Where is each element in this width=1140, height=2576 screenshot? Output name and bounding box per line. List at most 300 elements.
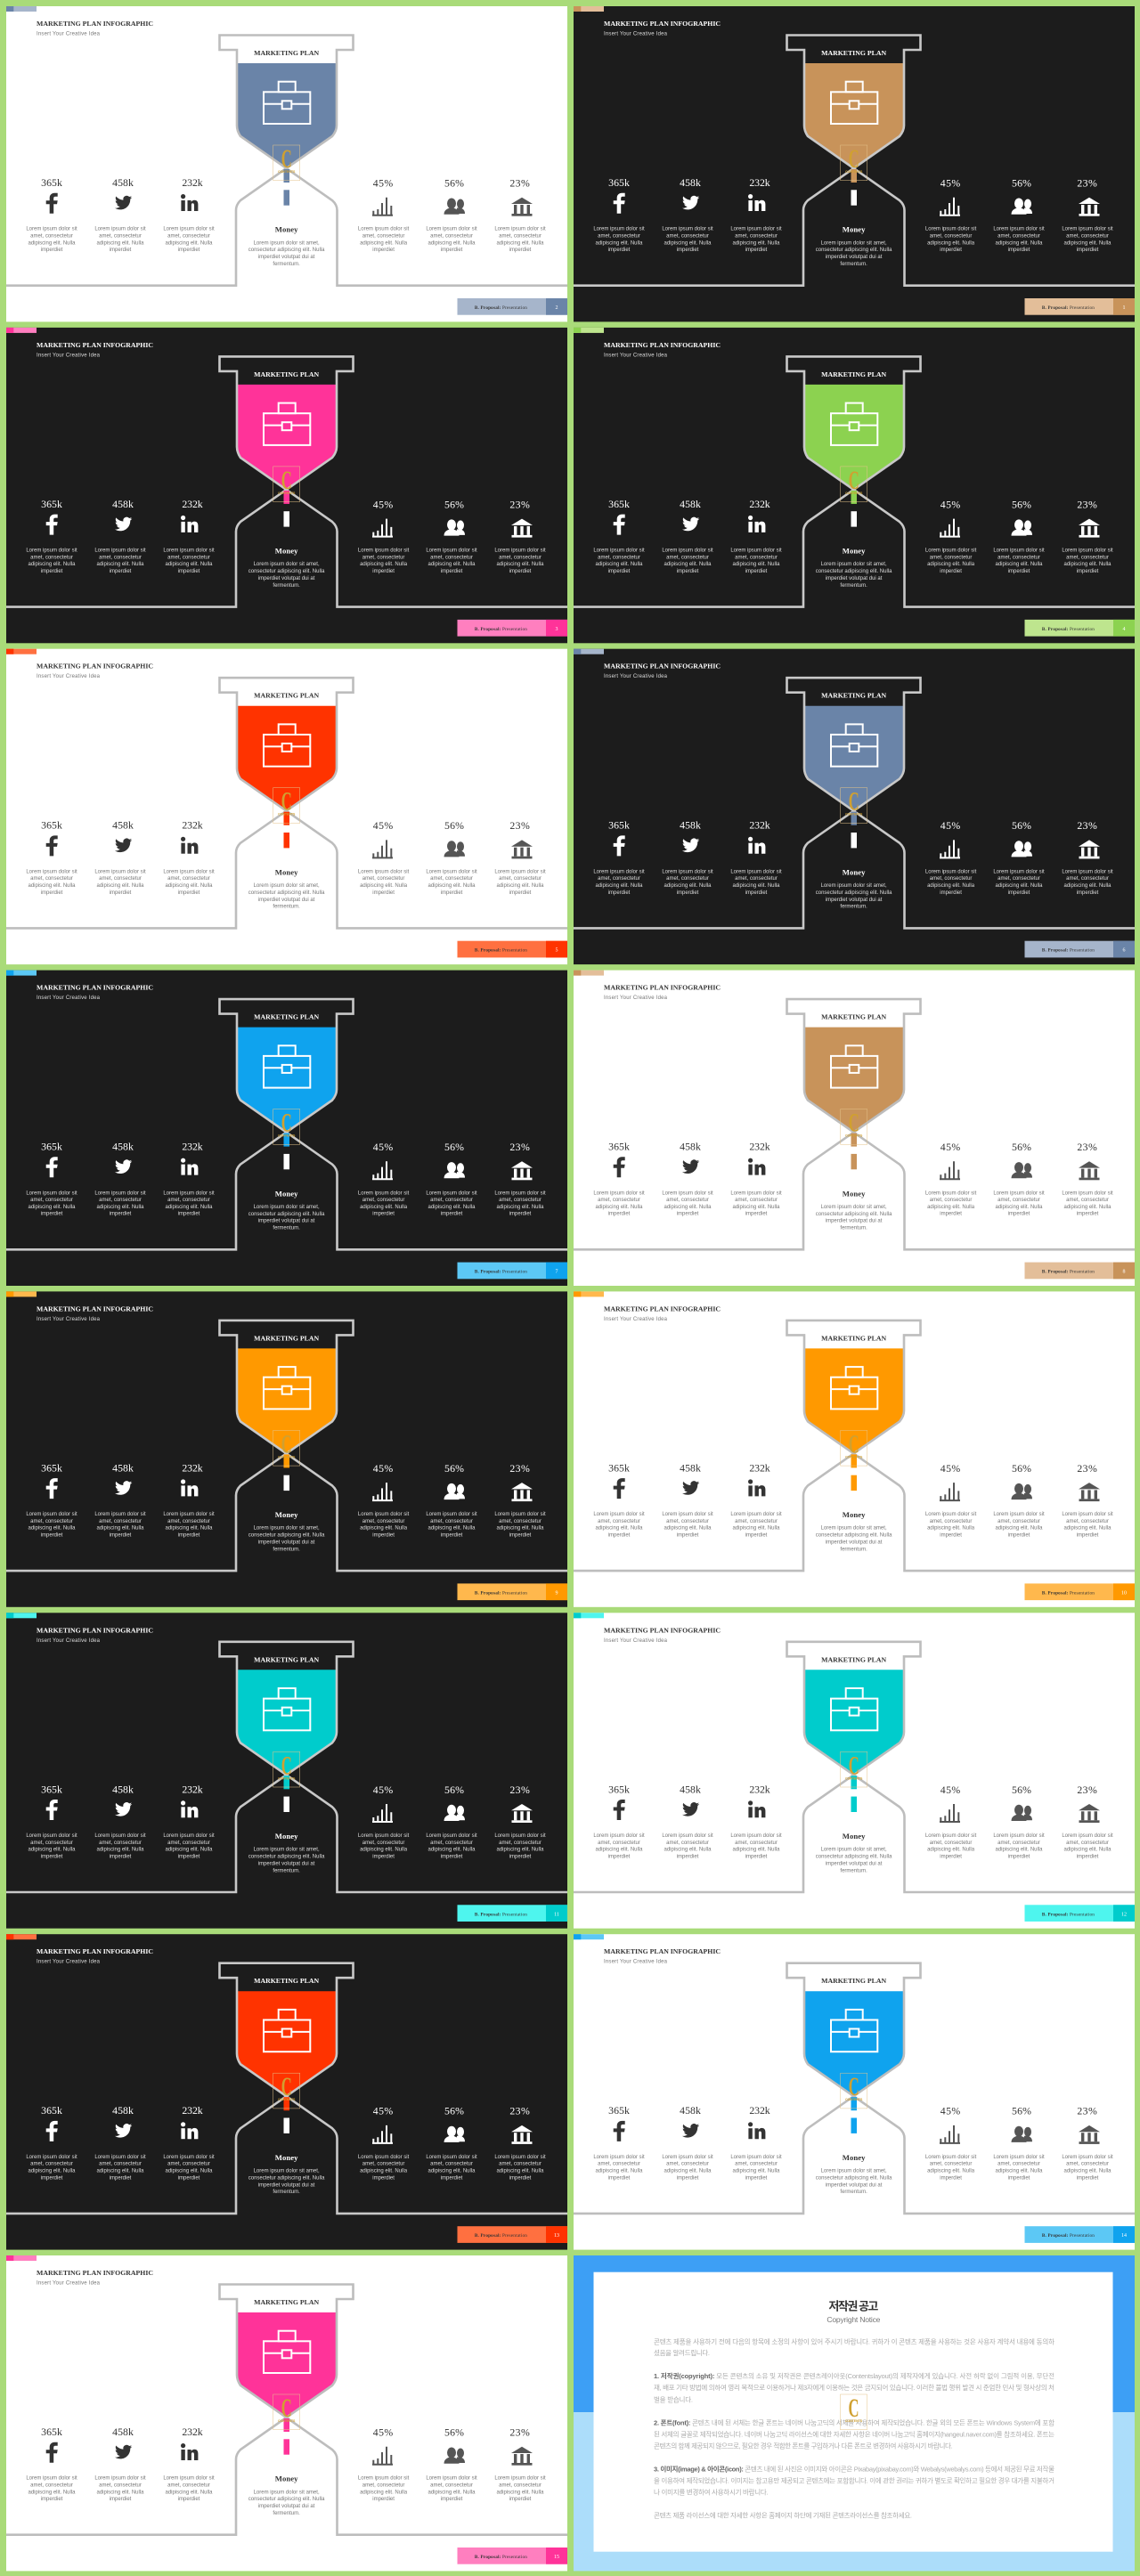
stat: bar chart: adipiscing elit. Nulla bbox=[360, 1848, 408, 1853]
hourglass fill bbox=[237, 63, 337, 168]
stat: users bbox=[993, 819, 1045, 896]
corner tab bbox=[574, 6, 604, 12]
stat: twitter bbox=[94, 819, 146, 896]
title: Insert Your Creative Idea bbox=[604, 32, 668, 37]
stat: twitter: imperdiet bbox=[677, 248, 699, 253]
center text: money: fermentum. bbox=[840, 262, 867, 267]
notice section 2: font: 된 서체의 글꼴로 제작되었습니다. 네이버 나눔고딕 라이선스에 대한 자세한 사항은 네이버 나눔고딕 홈페이지(hangeul.naver.com)를 참조하세요. 폰트는 bbox=[654, 2429, 1054, 2438]
falling sand bars bbox=[283, 169, 289, 206]
stat: bank: amet, consectetur bbox=[1066, 2162, 1109, 2167]
stat: bar chart: 45% bbox=[373, 2426, 393, 2438]
stat: bar chart: 45% bbox=[940, 1784, 960, 1796]
stat: facebook: Lorem ipsum dolor sit bbox=[26, 1512, 77, 1517]
stat: twitter bbox=[94, 2104, 146, 2181]
stat: facebook bbox=[26, 1783, 77, 1859]
stat: twitter: Lorem ipsum dolor sit bbox=[94, 1512, 146, 1517]
stat: twitter: amet, consectetur bbox=[666, 555, 709, 560]
watermark logo bbox=[273, 144, 300, 181]
stat: facebook: adipiscing elit. Nulla bbox=[28, 1848, 76, 1853]
title: Insert Your Creative Idea bbox=[604, 1960, 668, 1965]
stat: twitter: imperdiet bbox=[110, 1212, 132, 1217]
stat: linkedin: amet, consectetur bbox=[167, 233, 210, 239]
stat: bank: adipiscing elit. Nulla bbox=[496, 2168, 544, 2174]
stat: linkedin: imperdiet bbox=[745, 569, 768, 574]
center text: money bbox=[248, 547, 325, 589]
stat: facebook bbox=[593, 2104, 645, 2181]
stat: bank: adipiscing elit. Nulla bbox=[1063, 1205, 1112, 1210]
hourglass outline bbox=[574, 1963, 1135, 2214]
slide 7: dark, sky bbox=[6, 971, 567, 1286]
stat: bank: imperdiet bbox=[1077, 2175, 1099, 2181]
background bottom band bbox=[574, 2412, 1135, 2571]
stat: facebook: amet, consectetur bbox=[598, 2162, 640, 2167]
stat: facebook: amet, consectetur bbox=[598, 1519, 640, 1524]
watermark logo bbox=[841, 1429, 867, 1466]
stat: twitter: amet, consectetur bbox=[666, 876, 709, 882]
watermark logo bbox=[273, 1109, 300, 1144]
stat: users: adipiscing elit. Nulla bbox=[428, 562, 476, 567]
footer tag: 1 bbox=[1122, 305, 1126, 311]
stat: facebook: Lorem ipsum dolor sit bbox=[26, 869, 77, 874]
stat: users: adipiscing elit. Nulla bbox=[995, 2168, 1043, 2174]
stat: bar chart: adipiscing elit. Nulla bbox=[360, 1526, 408, 1532]
title: MARKETING PLAN INFOGRAPHIC bbox=[37, 662, 153, 670]
stat: users: Lorem ipsum dolor sit bbox=[993, 1833, 1045, 1839]
stat: twitter: Lorem ipsum dolor sit bbox=[94, 2155, 146, 2160]
stat: facebook: Lorem ipsum dolor sit bbox=[26, 549, 77, 554]
stat: facebook bbox=[593, 1141, 645, 1217]
stat: bank: 23% bbox=[509, 1784, 530, 1796]
stat: linkedin: amet, consectetur bbox=[735, 1519, 778, 1524]
center text: money bbox=[816, 547, 892, 589]
footer tag bbox=[458, 620, 567, 637]
notice subheading: Copyright Notice bbox=[826, 2315, 881, 2324]
stat: users bbox=[993, 1784, 1045, 1859]
stat: bar chart: Lorem ipsum dolor sit bbox=[358, 1512, 410, 1517]
icon: briefcase bbox=[831, 724, 877, 767]
stat: bar chart: adipiscing elit. Nulla bbox=[927, 1526, 975, 1532]
stat: facebook bbox=[593, 819, 645, 896]
stat: users: Lorem ipsum dolor sit bbox=[426, 1190, 477, 1196]
icon: briefcase bbox=[264, 1688, 310, 1730]
footer tag: 5 bbox=[556, 948, 558, 954]
stat: users: imperdiet bbox=[441, 1854, 463, 1859]
stat: bank: amet, consectetur bbox=[1066, 1841, 1109, 1846]
footer tag bbox=[458, 298, 567, 315]
stat: linkedin: Lorem ipsum dolor sit bbox=[730, 227, 782, 232]
stat: bank: imperdiet bbox=[1077, 890, 1099, 896]
notice intro: 셨음을 알려드립니다. bbox=[654, 2348, 710, 2357]
notice section 1: copyright bbox=[654, 2371, 1054, 2404]
stat: bank: Lorem ipsum dolor sit bbox=[1062, 1512, 1113, 1517]
footer tag bbox=[458, 2226, 567, 2243]
stat: users: imperdiet bbox=[441, 2497, 463, 2502]
footer tag bbox=[1024, 298, 1135, 315]
falling sand bars bbox=[283, 1454, 289, 1491]
watermark logo bbox=[273, 1429, 300, 1466]
watermark logo: CONTENTS bbox=[278, 813, 296, 817]
stat: bank: adipiscing elit. Nulla bbox=[496, 1205, 544, 1210]
hourglass fill bbox=[237, 1348, 337, 1453]
stat: bar chart: imperdiet bbox=[940, 569, 962, 574]
stat: twitter: amet, consectetur bbox=[99, 1519, 142, 1524]
title bbox=[37, 341, 153, 358]
stat: twitter: 458k bbox=[680, 819, 701, 832]
stat: bank: 23% bbox=[1077, 176, 1097, 189]
stat: users: Lorem ipsum dolor sit bbox=[426, 2155, 477, 2160]
center text: money: imperdiet volutpat dui at bbox=[258, 2504, 315, 2509]
center text: money: consectetur adipiscing elit. Nulla bbox=[248, 1855, 325, 1860]
watermark logo: CONTENTS bbox=[845, 1134, 863, 1138]
stat: linkedin: 232k bbox=[749, 498, 770, 510]
stat: bank: imperdiet bbox=[1077, 248, 1099, 253]
stat: bar chart bbox=[925, 819, 977, 896]
center text: money bbox=[816, 2153, 892, 2195]
stat: linkedin: amet, consectetur bbox=[735, 1841, 778, 1846]
footer tag bbox=[1024, 1583, 1135, 1600]
stat: linkedin: 232k bbox=[749, 2104, 770, 2117]
stat: bank: imperdiet bbox=[509, 1533, 532, 1539]
slide background bbox=[574, 6, 1135, 321]
stat: facebook: imperdiet bbox=[608, 1212, 631, 1217]
stat: twitter: amet, consectetur bbox=[99, 555, 142, 560]
center text: money: consectetur adipiscing elit. Nulla bbox=[248, 2497, 325, 2502]
stat: users: Lorem ipsum dolor sit bbox=[426, 869, 477, 874]
stat: users: amet, consectetur bbox=[998, 1519, 1040, 1524]
stat: linkedin bbox=[730, 819, 782, 896]
stat: facebook: Lorem ipsum dolor sit bbox=[593, 1833, 645, 1839]
stat: users: adipiscing elit. Nulla bbox=[995, 1205, 1043, 1210]
hourglass heading: MARKETING PLAN bbox=[254, 1013, 319, 1021]
falling sand bars bbox=[851, 1454, 857, 1491]
stat: linkedin: Lorem ipsum dolor sit bbox=[730, 869, 782, 874]
slide 13: dark, red bbox=[6, 1934, 567, 2250]
center text: money: Lorem ipsum dolor sit amet, bbox=[254, 1205, 320, 1210]
stat: users: Lorem ipsum dolor sit bbox=[426, 549, 477, 554]
stat: linkedin bbox=[730, 1783, 782, 1859]
watermark logo: C bbox=[849, 1751, 859, 1780]
watermark logo: C bbox=[281, 787, 292, 817]
stat: bank: Lorem ipsum dolor sit bbox=[1062, 869, 1113, 874]
stat: twitter: amet, consectetur bbox=[666, 1198, 709, 1203]
stat: bank: 23% bbox=[509, 2105, 530, 2117]
slide background bbox=[574, 1291, 1135, 1607]
stat: bank: Lorem ipsum dolor sit bbox=[494, 549, 546, 554]
center text: money: Lorem ipsum dolor sit amet, bbox=[821, 883, 887, 889]
center text: money: Money bbox=[843, 547, 866, 556]
stat: users: amet, consectetur bbox=[430, 876, 473, 882]
center text: money: fermentum. bbox=[840, 1226, 867, 1231]
center text: money: fermentum. bbox=[273, 1868, 300, 1873]
stat: users: imperdiet bbox=[1008, 1212, 1030, 1217]
stat: users: 56% bbox=[1012, 176, 1031, 189]
watermark logo: C bbox=[849, 144, 859, 174]
stat: twitter: adipiscing elit. Nulla bbox=[664, 1205, 712, 1210]
stat: bar chart: amet, consectetur bbox=[362, 233, 404, 239]
stat: facebook bbox=[593, 1461, 645, 1539]
watermark logo: CONTENTS bbox=[278, 1455, 296, 1459]
stat: facebook: amet, consectetur bbox=[598, 1198, 640, 1203]
footer tag: B. Proposal: Presentation bbox=[1042, 1590, 1095, 1596]
title: MARKETING PLAN INFOGRAPHIC bbox=[604, 1947, 721, 1955]
stat: twitter: imperdiet bbox=[677, 569, 699, 574]
center text: money: consectetur adipiscing elit. Nulla bbox=[248, 2175, 325, 2181]
stat: bank bbox=[494, 1462, 546, 1539]
center text: money: Lorem ipsum dolor sit amet, bbox=[821, 2168, 887, 2174]
title: MARKETING PLAN INFOGRAPHIC bbox=[37, 1304, 153, 1312]
stat: bar chart: amet, consectetur bbox=[362, 1519, 404, 1524]
stat: linkedin: 232k bbox=[182, 1141, 203, 1153]
stat: facebook: imperdiet bbox=[608, 1854, 631, 1859]
stat: bar chart: imperdiet bbox=[372, 1533, 395, 1539]
stat: bank: adipiscing elit. Nulla bbox=[1063, 2168, 1112, 2174]
stat: linkedin bbox=[163, 498, 215, 574]
stat: users: Lorem ipsum dolor sit bbox=[993, 1190, 1045, 1196]
watermark logo: CONTENTS bbox=[845, 2419, 863, 2423]
stat: facebook: imperdiet bbox=[608, 248, 631, 253]
watermark logo bbox=[841, 2393, 867, 2430]
stat: facebook: imperdiet bbox=[41, 2175, 63, 2181]
stat: bar chart: amet, consectetur bbox=[930, 1841, 972, 1846]
stat: users: Lorem ipsum dolor sit bbox=[426, 1833, 477, 1839]
stat: twitter bbox=[662, 2104, 713, 2181]
stat: bank: adipiscing elit. Nulla bbox=[496, 1848, 544, 1853]
footer tag: 2 bbox=[556, 305, 558, 311]
stat: facebook: adipiscing elit. Nulla bbox=[28, 240, 76, 246]
center text: money: imperdiet volutpat dui at bbox=[258, 255, 315, 260]
stat: bar chart: imperdiet bbox=[372, 1212, 395, 1217]
stat: users: amet, consectetur bbox=[998, 2162, 1040, 2167]
stat: linkedin: imperdiet bbox=[745, 1533, 768, 1539]
hourglass heading: MARKETING PLAN bbox=[254, 1334, 319, 1342]
slide background bbox=[6, 1613, 567, 1929]
stat: twitter: 458k bbox=[112, 176, 134, 189]
stat: bank: adipiscing elit. Nulla bbox=[1063, 883, 1112, 889]
stat: bar chart: adipiscing elit. Nulla bbox=[360, 883, 408, 889]
stat: twitter bbox=[662, 1783, 713, 1859]
stat: bank bbox=[494, 2426, 546, 2502]
stat: users: amet, consectetur bbox=[430, 1198, 473, 1203]
stat: facebook: 365k bbox=[41, 2104, 62, 2117]
stat: twitter: 458k bbox=[112, 2104, 134, 2117]
center text: money: Money bbox=[843, 867, 866, 876]
stat: twitter: amet, consectetur bbox=[99, 1841, 142, 1846]
stat: users: imperdiet bbox=[1008, 2175, 1030, 2181]
stat: users: adipiscing elit. Nulla bbox=[995, 240, 1043, 246]
center text: money: consectetur adipiscing elit. Nulla bbox=[248, 890, 325, 896]
stat: users: amet, consectetur bbox=[998, 876, 1040, 882]
stat: users bbox=[993, 1462, 1045, 1539]
stat: users: 56% bbox=[1012, 819, 1031, 832]
slide 11: dark, cyan bbox=[6, 1613, 567, 1929]
stat: linkedin: imperdiet bbox=[178, 1533, 200, 1539]
icon: briefcase bbox=[831, 2010, 877, 2052]
stat: users: Lorem ipsum dolor sit bbox=[993, 2155, 1045, 2160]
footer tag bbox=[1024, 941, 1135, 957]
stat: linkedin: Lorem ipsum dolor sit bbox=[730, 549, 782, 554]
stat: bank: 23% bbox=[1077, 1462, 1097, 1475]
center text: money bbox=[248, 2153, 325, 2195]
stat: facebook bbox=[26, 2104, 77, 2181]
center text: money: Money bbox=[275, 2474, 298, 2483]
stat: twitter: imperdiet bbox=[110, 2175, 132, 2181]
stat: twitter: imperdiet bbox=[110, 569, 132, 574]
footer tag: B. Proposal: Presentation bbox=[1042, 1912, 1095, 1917]
stat: twitter: adipiscing elit. Nulla bbox=[96, 1526, 144, 1532]
stat: facebook: 365k bbox=[41, 1461, 62, 1474]
stat: users: imperdiet bbox=[441, 569, 463, 574]
stat: facebook: 365k bbox=[608, 1461, 630, 1474]
stat: twitter: imperdiet bbox=[110, 248, 132, 253]
center text: money: Money bbox=[843, 1189, 866, 1198]
stat: linkedin: amet, consectetur bbox=[167, 1841, 210, 1846]
slide 8: white, tan bbox=[574, 971, 1135, 1286]
stat: users: amet, consectetur bbox=[430, 1519, 473, 1524]
watermark logo: C bbox=[849, 2072, 859, 2101]
notice section 1: copyright: 재, 배포 기타 방법에 의하여 영리 목적으로 이용하거나 제3자에게 이용하는 것은 금지되어 있습니다. 이러한 불법 행위 발견 시 준엄한 민사 및 형사상의 처 bbox=[654, 2383, 1054, 2392]
stat: linkedin: adipiscing elit. Nulla bbox=[732, 1205, 780, 1210]
stat: bank bbox=[1062, 2105, 1113, 2181]
stat: bar chart: amet, consectetur bbox=[362, 2162, 404, 2167]
footer tag: 8 bbox=[1122, 1270, 1126, 1275]
title: MARKETING PLAN INFOGRAPHIC bbox=[604, 662, 721, 670]
stat: twitter bbox=[94, 1141, 146, 1217]
center text: money bbox=[248, 1510, 325, 1552]
stat: linkedin: amet, consectetur bbox=[735, 1198, 778, 1203]
center text: money bbox=[248, 867, 325, 910]
stat: bank: Lorem ipsum dolor sit bbox=[1062, 1833, 1113, 1839]
watermark logo: CONTENTS bbox=[845, 813, 863, 817]
watermark logo bbox=[841, 787, 867, 823]
watermark logo: CONTENTS bbox=[845, 1776, 863, 1780]
stat: facebook: imperdiet bbox=[41, 248, 63, 253]
slide 16: copyright notice bbox=[574, 2255, 1135, 2571]
stat: linkedin: 232k bbox=[182, 2426, 203, 2438]
stat: users: imperdiet bbox=[1008, 890, 1030, 896]
footer tag: 14 bbox=[1121, 2233, 1127, 2239]
title bbox=[604, 20, 721, 37]
hourglass fill bbox=[804, 706, 904, 811]
center text: money: consectetur adipiscing elit. Nulla bbox=[248, 569, 325, 574]
stat: bar chart bbox=[358, 1784, 410, 1859]
icon: briefcase bbox=[831, 82, 877, 124]
stat: twitter: 458k bbox=[112, 2426, 134, 2438]
footer tag: B. Proposal: Presentation bbox=[475, 1270, 527, 1275]
icon: briefcase bbox=[264, 724, 310, 767]
stat: facebook: Lorem ipsum dolor sit bbox=[26, 1833, 77, 1839]
stat: users: amet, consectetur bbox=[430, 2162, 473, 2167]
stat: bank: amet, consectetur bbox=[1066, 555, 1109, 560]
stat: linkedin: amet, consectetur bbox=[167, 1519, 210, 1524]
stat: bank bbox=[1062, 498, 1113, 574]
center text: money bbox=[816, 1189, 892, 1231]
stat: bank: 23% bbox=[509, 1462, 530, 1475]
notice closing line: 콘텐츠 제품 라이선스에 대한 자세한 사항은 홈페이지 하단에 기재된 콘텐츠라이선스를 참조하세요. bbox=[654, 2510, 912, 2519]
center text: money: fermentum. bbox=[840, 583, 867, 589]
stat: facebook: amet, consectetur bbox=[30, 233, 73, 239]
title: MARKETING PLAN INFOGRAPHIC bbox=[604, 1304, 721, 1312]
stat: facebook: 365k bbox=[608, 176, 630, 189]
center text: money: fermentum. bbox=[273, 1226, 300, 1231]
stat: bar chart bbox=[358, 498, 410, 574]
stat: facebook: amet, consectetur bbox=[30, 1198, 73, 1203]
stat: bar chart: imperdiet bbox=[940, 890, 962, 896]
stat: bar chart: amet, consectetur bbox=[930, 1198, 972, 1203]
center text: money: Money bbox=[275, 225, 298, 234]
stat: linkedin: Lorem ipsum dolor sit bbox=[163, 2476, 215, 2482]
stat: bar chart: adipiscing elit. Nulla bbox=[927, 562, 975, 567]
hourglass outline bbox=[574, 356, 1135, 607]
hourglass heading: MARKETING PLAN bbox=[254, 370, 319, 378]
stat: linkedin: amet, consectetur bbox=[735, 233, 778, 239]
stat: twitter: imperdiet bbox=[677, 890, 699, 896]
hourglass fill bbox=[237, 1670, 337, 1775]
stat: twitter: amet, consectetur bbox=[99, 2483, 142, 2488]
stat: linkedin: amet, consectetur bbox=[167, 555, 210, 560]
stat: linkedin bbox=[163, 819, 215, 896]
center text: money: imperdiet volutpat dui at bbox=[258, 576, 315, 581]
stat: bank: adipiscing elit. Nulla bbox=[496, 240, 544, 246]
stat: bar chart: Lorem ipsum dolor sit bbox=[358, 869, 410, 874]
stat: bar chart: imperdiet bbox=[940, 1854, 962, 1859]
stat: linkedin: amet, consectetur bbox=[735, 555, 778, 560]
stat: bar chart: Lorem ipsum dolor sit bbox=[925, 227, 977, 232]
corner tab bbox=[6, 971, 37, 976]
footer tag: 3 bbox=[556, 627, 558, 632]
stat: users: imperdiet bbox=[1008, 1854, 1030, 1859]
stat: linkedin: 232k bbox=[182, 176, 203, 189]
stat: facebook: 365k bbox=[608, 2104, 630, 2117]
stat: bank: imperdiet bbox=[1077, 1212, 1099, 1217]
corner tab bbox=[6, 1613, 37, 1618]
stat: users: 56% bbox=[444, 819, 464, 832]
stat: linkedin: Lorem ipsum dolor sit bbox=[163, 869, 215, 874]
center text: money: fermentum. bbox=[273, 905, 300, 910]
stat: bank: imperdiet bbox=[509, 890, 532, 896]
stat: facebook: Lorem ipsum dolor sit bbox=[26, 227, 77, 232]
stat: bar chart: imperdiet bbox=[372, 248, 395, 253]
falling sand bars bbox=[283, 1776, 289, 1812]
stat: users bbox=[426, 1462, 477, 1539]
slide 15: white, pink bbox=[6, 2255, 567, 2571]
stat: bar chart: amet, consectetur bbox=[362, 555, 404, 560]
stat: bar chart: Lorem ipsum dolor sit bbox=[358, 2476, 410, 2482]
stat: facebook: 365k bbox=[41, 1783, 62, 1795]
hourglass outline bbox=[6, 356, 567, 607]
center text: money: consectetur adipiscing elit. Nulla bbox=[816, 569, 892, 574]
stat: bank bbox=[494, 1784, 546, 1859]
stat: facebook: 365k bbox=[608, 498, 630, 510]
stat: linkedin: 232k bbox=[749, 1461, 770, 1474]
stat: users: Lorem ipsum dolor sit bbox=[426, 1512, 477, 1517]
hourglass fill bbox=[804, 1670, 904, 1775]
stat: linkedin: adipiscing elit. Nulla bbox=[732, 1526, 780, 1532]
stat: linkedin: 232k bbox=[182, 819, 203, 832]
stat: users: adipiscing elit. Nulla bbox=[995, 883, 1043, 889]
stat: bank: Lorem ipsum dolor sit bbox=[494, 227, 546, 232]
stat: bank: Lorem ipsum dolor sit bbox=[1062, 1190, 1113, 1196]
hourglass outline bbox=[6, 1642, 567, 1892]
slide background bbox=[574, 649, 1135, 964]
hourglass outline bbox=[6, 2285, 567, 2535]
hourglass heading: MARKETING PLAN bbox=[821, 1655, 886, 1663]
stat: bar chart: Lorem ipsum dolor sit bbox=[925, 869, 977, 874]
stat: bar chart: Lorem ipsum dolor sit bbox=[925, 1512, 977, 1517]
stat: facebook: adipiscing elit. Nulla bbox=[595, 240, 643, 246]
stat: facebook: adipiscing elit. Nulla bbox=[595, 2168, 643, 2174]
stat: facebook: imperdiet bbox=[608, 890, 631, 896]
center text: money: Money bbox=[275, 1832, 298, 1841]
